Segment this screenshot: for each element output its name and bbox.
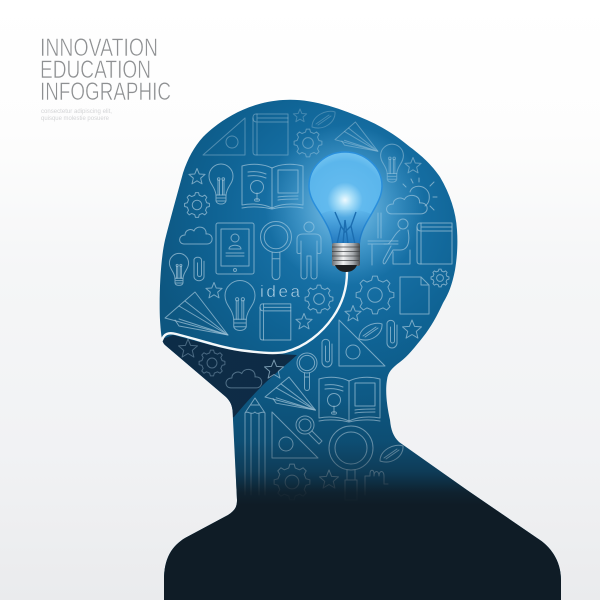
icon: star at neck xyxy=(264,360,284,378)
icon: star by bulb xyxy=(206,282,222,298)
icon: cloud in chin xyxy=(226,369,262,388)
icon: tablet xyxy=(216,223,254,274)
icon: gear lower xyxy=(274,464,310,500)
icon: small magnifier xyxy=(296,416,322,444)
icon pattern xyxy=(165,109,452,500)
icon: top star xyxy=(293,109,307,122)
icon: top triangle xyxy=(203,118,245,155)
title line: innovation: INNOVATION xyxy=(40,34,158,62)
icon: neck triangle xyxy=(272,412,318,458)
icon: paper clip right xyxy=(387,320,397,348)
icon: green book xyxy=(260,304,291,340)
icon: gear left xyxy=(185,193,209,217)
icon: sun behind cloud xyxy=(403,178,437,210)
bulb glow xyxy=(265,125,425,285)
bulb glass xyxy=(309,152,382,244)
icon: star far right xyxy=(402,320,422,338)
icon: large bulb outline xyxy=(225,280,255,330)
subtitle text xyxy=(41,108,112,122)
icon: person at desk xyxy=(368,213,410,265)
icon: magnifier centre xyxy=(297,353,317,390)
icon: star right xyxy=(405,158,421,173)
icon: hand xyxy=(365,470,388,495)
icon: top gear xyxy=(294,129,322,157)
head silhouette xyxy=(150,90,570,600)
icon: pencil xyxy=(245,398,265,495)
silhouette fill xyxy=(160,100,561,580)
title line: education: EDUCATION xyxy=(40,56,151,84)
icon: person xyxy=(297,222,321,279)
title line: infographic: INFOGRAPHIC xyxy=(40,78,171,106)
icon: top leaf xyxy=(312,111,335,128)
icon: bulb outline right xyxy=(381,144,403,182)
icon: gear beside wire xyxy=(305,285,333,313)
icon: paper clip centre xyxy=(322,339,332,367)
icon: leaf lower xyxy=(380,445,403,462)
icon: leaf right xyxy=(359,323,382,340)
idea word: idea xyxy=(260,282,301,301)
white wire outlining the brain xyxy=(162,272,347,353)
icon: gear right xyxy=(431,269,449,287)
icon: large gear xyxy=(356,276,394,314)
icon: gear in chin xyxy=(199,350,225,376)
light bulb xyxy=(309,152,382,272)
bulb screw base xyxy=(332,243,360,272)
icon: open book xyxy=(242,164,303,209)
icon: paper clip left xyxy=(194,257,204,281)
title xyxy=(40,34,171,106)
icon: bulb outline left xyxy=(209,164,233,204)
bulb neck shade xyxy=(321,210,371,244)
icon: top notebook xyxy=(253,114,288,155)
icon: plane left xyxy=(165,292,228,335)
subtitle line 1: consectetur adipiscing elit, xyxy=(41,108,112,115)
icon: star left xyxy=(189,168,205,184)
icon: small bulb xyxy=(169,253,189,285)
icon: large ring magnifier xyxy=(329,426,373,500)
icon: magnifier xyxy=(260,222,292,280)
icon: star lower xyxy=(320,470,338,488)
icon: star in chin xyxy=(178,339,198,357)
neck shadow under the chin xyxy=(162,335,297,418)
bulb filament xyxy=(335,212,356,244)
icon: star under wire xyxy=(296,314,312,329)
icon: cloud right xyxy=(387,195,427,214)
bottom dark fade xyxy=(150,400,570,600)
icon: open book lower xyxy=(319,377,380,422)
icon: star by gear xyxy=(345,306,361,321)
icon: top plane xyxy=(335,122,378,151)
icon: plane in neck xyxy=(265,377,315,410)
icon: cloud left xyxy=(180,227,212,244)
icon: document xyxy=(400,277,429,314)
icon: right triangle xyxy=(339,320,385,366)
icon: book right xyxy=(417,223,452,264)
subtitle line 2: quisque molestie posuere xyxy=(41,115,109,122)
